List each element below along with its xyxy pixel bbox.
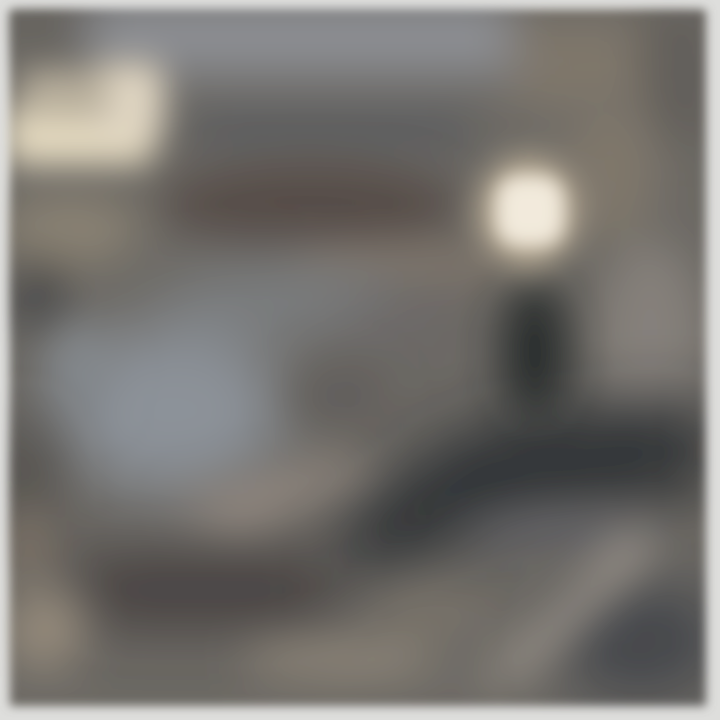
glow: upper-left cream light xyxy=(5,62,164,165)
blue-grey water mass xyxy=(55,272,470,495)
dark green tree xyxy=(501,280,569,420)
sky band xyxy=(0,0,710,150)
dark shadow masses xyxy=(3,400,720,700)
warm sand highlights xyxy=(7,455,660,695)
glow: bright sun patch xyxy=(478,156,578,268)
midground hills xyxy=(4,112,706,412)
